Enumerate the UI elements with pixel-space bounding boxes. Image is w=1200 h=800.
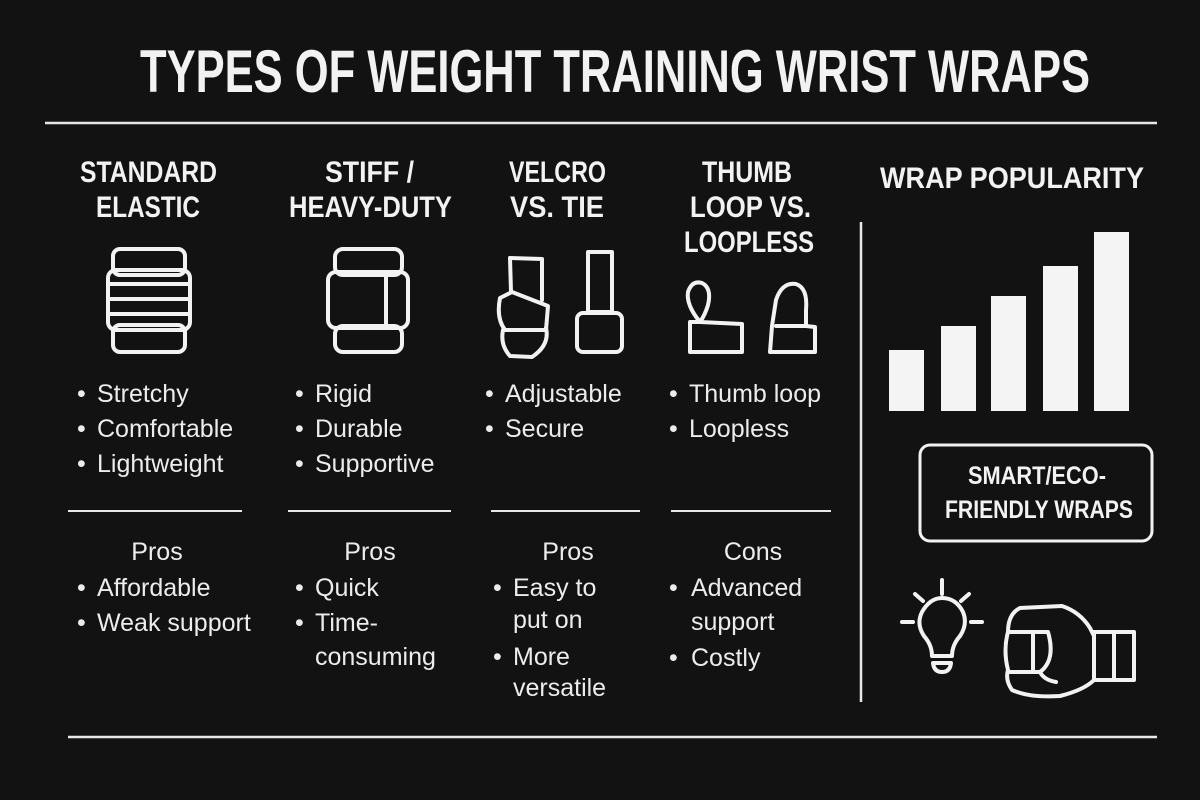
features list: Adjustable bbox=[505, 380, 622, 408]
bar chart bbox=[889, 232, 1129, 411]
callout: smart/eco-friendly wraps: FRIENDLY WRAPS bbox=[945, 496, 1133, 524]
pros list: Affordable bbox=[97, 574, 211, 602]
features list: • bbox=[295, 450, 304, 478]
panel: standard elastic bbox=[68, 156, 251, 637]
heading: thumb loop bbox=[684, 156, 814, 259]
features list bbox=[485, 380, 622, 443]
callout: smart/eco-friendly wraps: SMART/ECO- bbox=[968, 462, 1106, 490]
heading: standard elastic bbox=[80, 156, 217, 224]
features list bbox=[295, 380, 435, 478]
features list: • bbox=[77, 380, 86, 408]
pros list: • bbox=[493, 574, 502, 602]
callout: smart/eco-friendly wraps bbox=[920, 445, 1152, 541]
heading: stiff: STIFF / bbox=[325, 156, 415, 189]
pros list: Time- bbox=[315, 609, 378, 637]
features list: • bbox=[295, 415, 304, 443]
features list: • bbox=[295, 380, 304, 408]
heading: stiff: HEAVY-DUTY bbox=[289, 191, 452, 224]
features list: Thumb loop bbox=[689, 380, 821, 408]
pros list bbox=[295, 538, 436, 671]
heading: wrap popularity: WRAP POPULARITY bbox=[880, 162, 1144, 195]
features list: • bbox=[77, 450, 86, 478]
cons list: • bbox=[669, 644, 678, 672]
panel: stiff heavy-duty bbox=[288, 156, 452, 671]
cons list: support bbox=[691, 608, 774, 636]
pros list: put on bbox=[513, 606, 583, 634]
heading: thumb loop: LOOPLESS bbox=[684, 226, 814, 259]
features list: • bbox=[669, 415, 678, 443]
pros list: • bbox=[295, 574, 304, 602]
features list: • bbox=[77, 415, 86, 443]
pros list: Quick bbox=[315, 574, 379, 602]
heading: velcro: VELCRO bbox=[509, 156, 606, 189]
panel: wrap popularity bbox=[880, 162, 1152, 696]
features list: Comfortable bbox=[97, 415, 233, 443]
pros list: Pros bbox=[344, 538, 396, 566]
pros list: Pros bbox=[131, 538, 183, 566]
heading: thumb loop: THUMB bbox=[702, 156, 792, 189]
heading: standard elastic: ELASTIC bbox=[96, 191, 200, 224]
cons list: Advanced bbox=[691, 574, 802, 602]
pros list: Pros bbox=[542, 538, 594, 566]
heading: velcro: VS. TIE bbox=[510, 191, 604, 224]
pros list bbox=[77, 538, 251, 637]
features list: Stretchy bbox=[97, 380, 189, 408]
heading: thumb loop: LOOP VS. bbox=[690, 191, 811, 224]
pros list: More bbox=[513, 643, 570, 671]
panel: velcro vs tie bbox=[485, 156, 640, 702]
features list: Secure bbox=[505, 415, 584, 443]
icon: velcro and tie wraps bbox=[499, 252, 622, 357]
icon: stiff wrap bbox=[328, 249, 408, 352]
features list: Durable bbox=[315, 415, 403, 443]
panel: thumb loop bbox=[669, 156, 831, 672]
cons list: • bbox=[669, 574, 678, 602]
pros list: • bbox=[77, 574, 86, 602]
features list: Lightweight bbox=[97, 450, 224, 478]
pros list: Easy to bbox=[513, 574, 596, 602]
pros list bbox=[493, 538, 606, 702]
pros list: • bbox=[77, 609, 86, 637]
pros list: Weak support bbox=[97, 609, 251, 637]
features list: Supportive bbox=[315, 450, 435, 478]
pros list: • bbox=[295, 609, 304, 637]
icon: thumb loop and loopless bbox=[688, 282, 815, 352]
pros list: consuming bbox=[315, 643, 436, 671]
cons list: Cons bbox=[724, 538, 782, 566]
cons list: Costly bbox=[691, 644, 761, 672]
features list: • bbox=[669, 380, 678, 408]
icon: elastic wrap bbox=[108, 249, 190, 352]
heading: stiff bbox=[289, 156, 452, 224]
pros list: • bbox=[493, 643, 502, 671]
features list: • bbox=[485, 415, 494, 443]
pros list: versatile bbox=[513, 674, 606, 702]
features list bbox=[669, 380, 821, 443]
cons list bbox=[669, 538, 802, 672]
heading: velcro bbox=[509, 156, 606, 224]
features list: • bbox=[485, 380, 494, 408]
heading: standard elastic: STANDARD bbox=[80, 156, 217, 189]
features list bbox=[77, 380, 233, 478]
features list: Loopless bbox=[689, 415, 789, 443]
icon: wrapped fist bbox=[1006, 606, 1134, 696]
features list: Rigid bbox=[315, 380, 372, 408]
icon: lightbulb bbox=[902, 580, 982, 672]
